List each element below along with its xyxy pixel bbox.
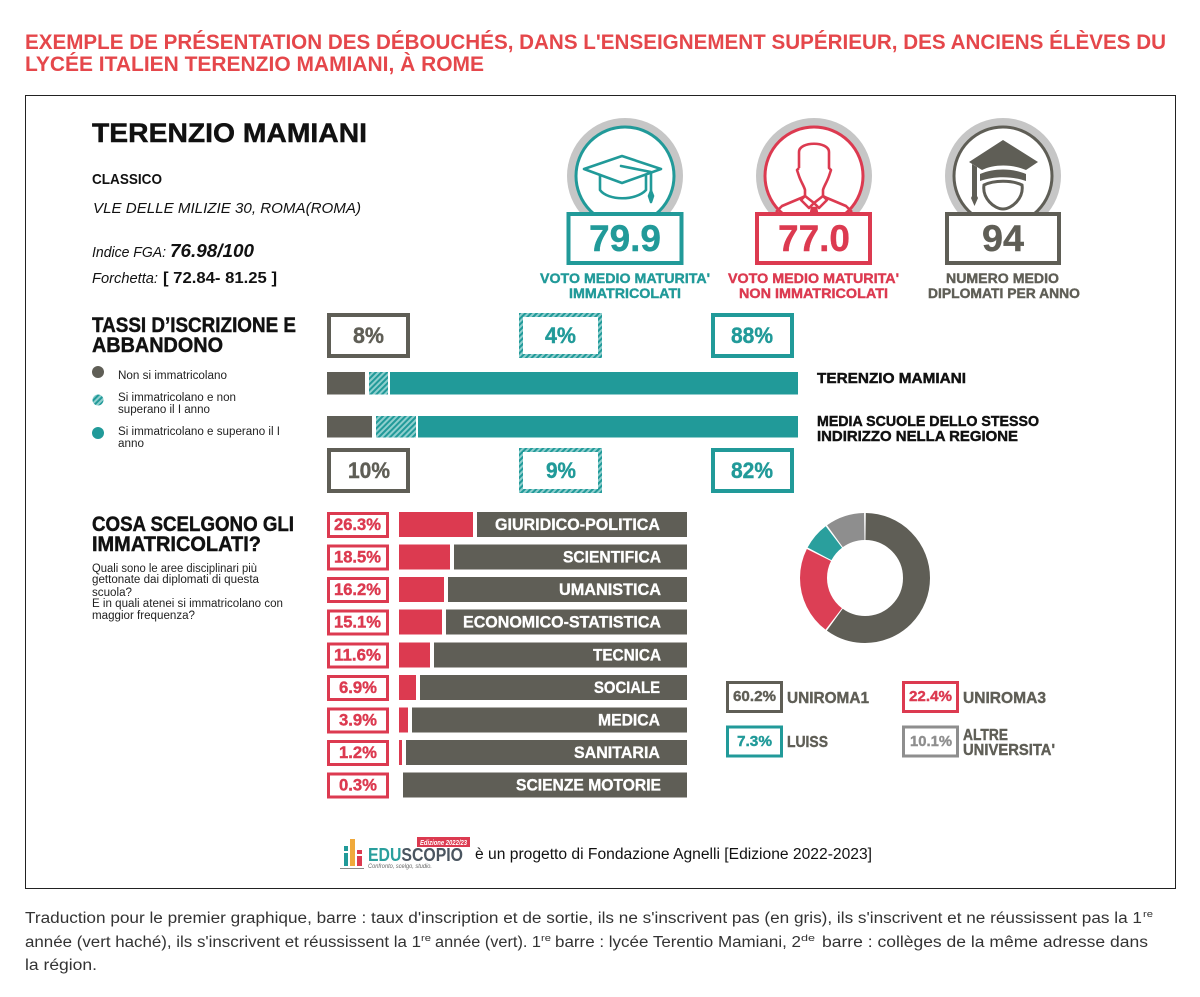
school header: CLASSICO bbox=[92, 171, 162, 188]
chart: disciplinary areas bbox=[328, 512, 687, 798]
row: umanistica bbox=[328, 577, 687, 602]
legend: rates: Si immatricolano e non bbox=[118, 392, 236, 404]
row: scientifica: 18.5% bbox=[334, 548, 381, 566]
label: bar region: INDIRIZZO NELLA REGIONE bbox=[817, 428, 1018, 445]
school header: [ 72.84- 81.25 ] bbox=[163, 270, 277, 287]
heading: tassi d'iscrizione: TASSI D’ISCRIZIONE E bbox=[92, 314, 296, 337]
caption: Traduction pour le premier graphique, barre : taux d'inscription et de sortie, ils ne s'inscrivent pas (en gris), ils s'inscrivent et ne réussissent pas la 1 bbox=[25, 910, 1142, 927]
chart: rates boxes bottom: 10% bbox=[348, 458, 390, 483]
logo: eduscopio: EDUSCOPIO bbox=[368, 845, 463, 865]
heading: cosa scelgono: IMMATRICOLATI? bbox=[92, 533, 261, 556]
chart: stacked bar school bbox=[327, 372, 798, 394]
label: bar region: MEDIA SCUOLE DELLO STESSO bbox=[817, 413, 1039, 430]
caption: re bbox=[421, 933, 431, 943]
row: umanistica: 16.2% bbox=[334, 580, 381, 599]
kpi: numero diplomati bbox=[928, 118, 1080, 301]
row: scientifica bbox=[328, 544, 687, 570]
row: sanitaria bbox=[328, 740, 687, 765]
row: sanitaria: SANITARIA bbox=[574, 743, 660, 762]
row: economico-statistica bbox=[328, 610, 687, 634]
legend: universities: 7.3% bbox=[737, 733, 772, 750]
chart: rates boxes bottom: 82% bbox=[731, 458, 773, 483]
legend: universities: 10.1% bbox=[910, 733, 952, 750]
legend: universities: UNIVERSITA' bbox=[963, 742, 1055, 759]
row: sociale: 6.9% bbox=[339, 678, 377, 697]
row: sociale bbox=[328, 675, 687, 700]
heading: cosa scelgono: COSA SCELGONO GLI bbox=[92, 513, 294, 536]
title: LYCÉE ITALIEN TERENZIO MAMIANI, À ROME bbox=[25, 53, 484, 76]
legend: universities: LUISS bbox=[787, 734, 828, 751]
text: cosa scelgono description: Quali sono le aree disciplinari più bbox=[92, 563, 257, 575]
text: cosa scelgono description bbox=[92, 563, 283, 622]
panel: school frame bbox=[26, 96, 1176, 888]
row: scientifica: SCIENTIFICA bbox=[563, 548, 661, 566]
text: cosa scelgono description: scuola? bbox=[92, 587, 132, 599]
heading: cosa scelgono bbox=[92, 513, 294, 556]
label: bar region bbox=[817, 413, 1039, 445]
kpi: voto immatricolati: IMMATRICOLATI bbox=[569, 285, 681, 301]
row: umanistica: UMANISTICA bbox=[559, 580, 661, 599]
kpi: voto immatricolati bbox=[540, 118, 710, 301]
title bbox=[25, 31, 1166, 76]
caption: re bbox=[1143, 909, 1153, 919]
caption: de bbox=[801, 933, 815, 943]
legend: rates: Non si immatricolano bbox=[118, 370, 227, 382]
logo: eduscopio: Confronto, scelgo, studio. bbox=[368, 864, 432, 870]
text: cosa scelgono description: gettonate dai diplomati di questa bbox=[92, 574, 260, 586]
legend: universities: UNIROMA1 bbox=[787, 690, 869, 707]
caption: année (vert haché), ils s'inscrivent et réussissent la 1 bbox=[25, 934, 421, 951]
row: sanitaria: 1.2% bbox=[339, 743, 377, 762]
legend: rates: Si immatricolano e superano il I bbox=[118, 426, 280, 438]
caption: la région. bbox=[25, 957, 97, 974]
kpi: voto immatricolati: VOTO MEDIO MATURITA' bbox=[540, 270, 710, 286]
caption: barre : collèges de la même adresse dans bbox=[822, 934, 1148, 951]
text: cosa scelgono description: maggior frequenza? bbox=[92, 610, 195, 622]
row: giuridico-politica: 26.3% bbox=[334, 515, 381, 534]
kpi: numero diplomati: NUMERO MEDIO bbox=[946, 270, 1059, 286]
school header: Forchetta: bbox=[92, 270, 158, 287]
school header bbox=[92, 118, 367, 287]
icon: person outline bbox=[776, 144, 852, 213]
caption: barre : lycée Terentio Mamiani, 2 bbox=[555, 934, 801, 951]
chart: rates boxes bottom bbox=[329, 450, 792, 491]
school header: TERENZIO MAMIANI bbox=[92, 118, 367, 148]
chart: university donut bbox=[814, 526, 916, 630]
text: cosa scelgono description: E in quali atenei si immatricolano con bbox=[92, 598, 283, 610]
row: medica: 3.9% bbox=[339, 710, 377, 730]
row: scienze motorie: SCIENZE MOTORIE bbox=[516, 776, 661, 794]
school header: 76.98/100 bbox=[170, 241, 254, 261]
heading: tassi d'iscrizione: ABBANDONO bbox=[92, 334, 223, 357]
logo: eduscopio bbox=[340, 837, 470, 870]
chart: rates boxes top bbox=[329, 315, 792, 356]
logo: eduscopio: Edizione 2022/23 bbox=[420, 838, 468, 847]
chart: rates boxes top: 8% bbox=[353, 323, 384, 348]
chart: rates boxes bottom: 9% bbox=[546, 458, 576, 483]
row: tecnica: TECNICA bbox=[593, 646, 661, 664]
row: medica: MEDICA bbox=[598, 710, 660, 730]
legend: rates: anno bbox=[118, 438, 144, 450]
title: EXEMPLE DE PRÉSENTATION DES DÉBOUCHÉS, DANS L'ENSEIGNEMENT SUPÉRIEUR, DES ANCIENS ÉLÈVES DU bbox=[25, 31, 1166, 54]
row: sociale: SOCIALE bbox=[594, 678, 660, 697]
row: scienze motorie: 0.3% bbox=[339, 776, 377, 794]
legend: universities bbox=[728, 682, 1055, 759]
chart: stacked bar region bbox=[327, 416, 798, 438]
row: giuridico-politica bbox=[328, 512, 687, 537]
school header: Indice FGA: bbox=[92, 244, 166, 261]
icon: graduation cap bbox=[584, 156, 661, 202]
label: bar school: TERENZIO MAMIANI bbox=[817, 370, 966, 387]
row: tecnica bbox=[328, 642, 687, 668]
heading: tassi d'iscrizione bbox=[92, 314, 296, 357]
kpi: voto non immatricolati: VOTO MEDIO MATURITA' bbox=[728, 270, 899, 286]
legend: universities: 60.2% bbox=[733, 688, 776, 705]
row: economico-statistica: 15.1% bbox=[334, 612, 381, 632]
text: project credit: è un progetto di Fondazione Agnelli [Edizione 2022-2023] bbox=[475, 846, 872, 863]
caption bbox=[25, 909, 1153, 974]
caption: re bbox=[541, 933, 551, 943]
legend: universities: UNIROMA3 bbox=[963, 690, 1046, 707]
caption: année (vert). 1 bbox=[435, 934, 541, 951]
legend: universities: 22.4% bbox=[909, 688, 952, 705]
kpi: numero diplomati: 94 bbox=[982, 218, 1024, 259]
legend: rates bbox=[92, 366, 280, 450]
kpi: voto immatricolati: 79.9 bbox=[589, 218, 661, 259]
chart: rates boxes top: 4% bbox=[545, 323, 576, 348]
school header: VLE DELLE MILIZIE 30, ROMA(ROMA) bbox=[93, 200, 361, 217]
legend: rates: superano il I anno bbox=[118, 404, 210, 416]
kpi: voto non immatricolati: NON IMMATRICOLATI bbox=[739, 285, 888, 301]
row: tecnica: 11.6% bbox=[334, 646, 381, 664]
row: giuridico-politica: GIURIDICO-POLITICA bbox=[495, 515, 660, 534]
chart: rates boxes top: 88% bbox=[731, 323, 773, 348]
kpi: voto non immatricolati: 77.0 bbox=[778, 218, 850, 259]
row: scienze motorie bbox=[328, 772, 687, 798]
kpi: voto non immatricolati bbox=[728, 118, 899, 301]
kpi: numero diplomati: DIPLOMATI PER ANNO bbox=[928, 285, 1080, 301]
row: economico-statistica: ECONOMICO-STATISTICA bbox=[463, 612, 661, 632]
legend: universities: ALTRE bbox=[963, 727, 1008, 744]
icon: student with cap bbox=[969, 140, 1038, 209]
row: medica bbox=[328, 708, 687, 732]
